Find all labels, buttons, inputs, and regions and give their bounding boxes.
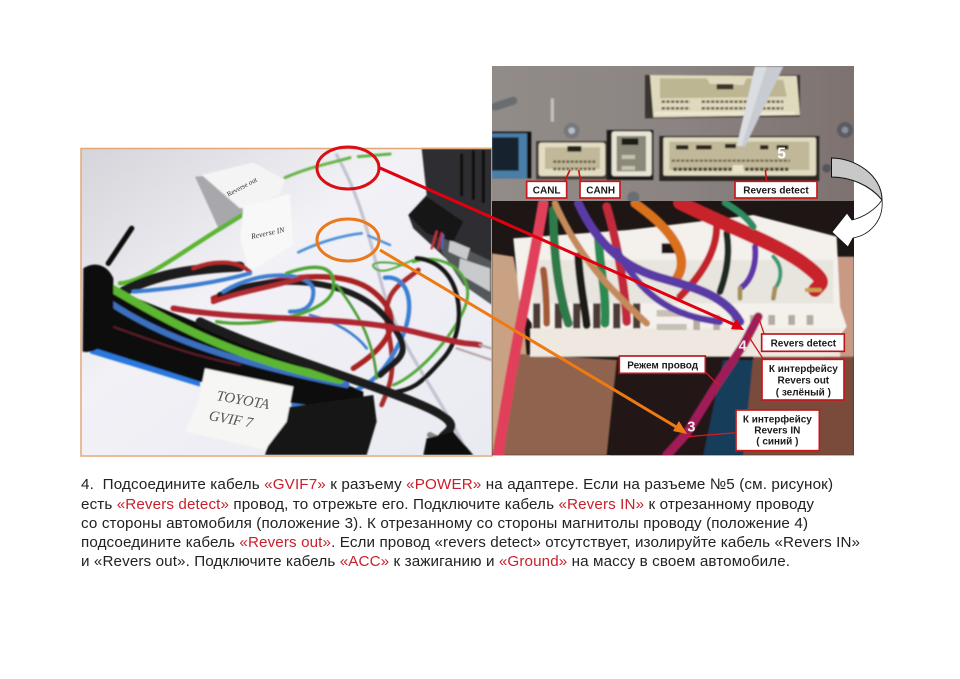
label: К интерфейсу Revers IN bbox=[736, 410, 819, 451]
curved arrow between connector photos bbox=[832, 158, 882, 247]
instruction text bbox=[81, 476, 860, 570]
photo: GVIF7 cable wiring harness: TOYOTA bbox=[215, 388, 271, 413]
label: Revers detect: Revers detect bbox=[771, 339, 837, 350]
callout: red ring and arrow bbox=[317, 147, 744, 330]
label: CANL: CANL bbox=[533, 186, 561, 197]
blue connector bbox=[492, 132, 531, 178]
photo: GVIF7 cable wiring harness: Reverse IN bbox=[249, 225, 286, 241]
Toyota tag bbox=[185, 368, 293, 450]
cable tie and clamp bbox=[108, 228, 132, 263]
instruction text: подсоедините кабель «Revers out». Если провод «revers detect» отсутствует, изолируйте кабель «Revers IN» bbox=[81, 534, 860, 551]
screwdriver bbox=[737, 67, 783, 147]
label: CANH bbox=[580, 181, 620, 198]
Reverse IN blue wire bbox=[298, 233, 362, 252]
label: Revers detect top bbox=[735, 181, 817, 198]
label: Режем провод: Режем провод bbox=[627, 361, 699, 372]
label: К интерфейсу Revers out: К интерфейсу bbox=[769, 363, 838, 375]
wires bbox=[553, 210, 568, 323]
small connector bbox=[607, 130, 653, 180]
photo: connector close-up with wires bbox=[492, 201, 854, 455]
CAN connector bbox=[536, 141, 609, 179]
photo: GVIF7 cable wiring harness bbox=[81, 148, 492, 455]
white connector bbox=[513, 215, 847, 357]
label: CANL bbox=[527, 181, 567, 198]
label: К интерфейсу Revers out: Revers out bbox=[778, 375, 830, 386]
label: К интерфейсу Revers IN: ( синий ) bbox=[756, 437, 798, 448]
photo: connector close-up with wires: 3 bbox=[687, 420, 695, 436]
label: К интерфейсу Revers IN: Revers IN bbox=[754, 425, 800, 436]
cut wire bbox=[667, 317, 758, 455]
label: Revers detect top: Revers detect bbox=[743, 186, 809, 197]
photo: head unit rear connectors bbox=[492, 66, 854, 205]
label: Revers detect bbox=[762, 334, 844, 351]
numbers 4 and 3: 4 bbox=[739, 339, 748, 355]
labels bbox=[202, 162, 285, 208]
Reverse out green wire bbox=[285, 158, 350, 178]
photo: GVIF7 cable wiring harness: GVIF 7 bbox=[208, 408, 255, 432]
callout: orange ring and arrow bbox=[317, 219, 687, 434]
screws bbox=[564, 123, 580, 139]
label: К интерфейсу Revers IN: К интерфейсу bbox=[743, 414, 812, 426]
photo: GVIF7 cable wiring harness: Reverse out bbox=[226, 176, 259, 198]
instruction text: есть «Revers detect» провод, то отрежьте его. Подключите кабель «Revers IN» к отрезанному проводу bbox=[81, 496, 814, 513]
instruction text: и «Revers out». Подключите кабель «ACC» к зажиганию и «Ground» на массу в своем автомобиле. bbox=[81, 553, 790, 570]
main bundle bbox=[90, 345, 200, 387]
label: К интерфейсу Revers out bbox=[762, 359, 844, 400]
wire loops bbox=[123, 267, 240, 292]
label: CANH: CANH bbox=[586, 186, 615, 197]
number 5: 5 bbox=[777, 145, 786, 162]
instruction text: 4. Подсоедините кабель «GVIF7» к разъему «POWER» на адаптере. Если на разъеме №5 (см. рисунок) bbox=[81, 476, 833, 493]
upper connector bbox=[645, 75, 800, 118]
instruction text: со стороны автомобиля (положение 3). К отрезанному со стороны магнитолы проводу (положение 4) bbox=[81, 515, 808, 532]
label: К интерфейсу Revers out: ( зелёный ) bbox=[776, 387, 831, 398]
main connector bbox=[659, 136, 819, 181]
connector bbox=[265, 395, 377, 455]
photo frame bbox=[81, 148, 492, 456]
fingers and lower background bbox=[492, 253, 527, 455]
label: Режем провод bbox=[619, 356, 705, 373]
